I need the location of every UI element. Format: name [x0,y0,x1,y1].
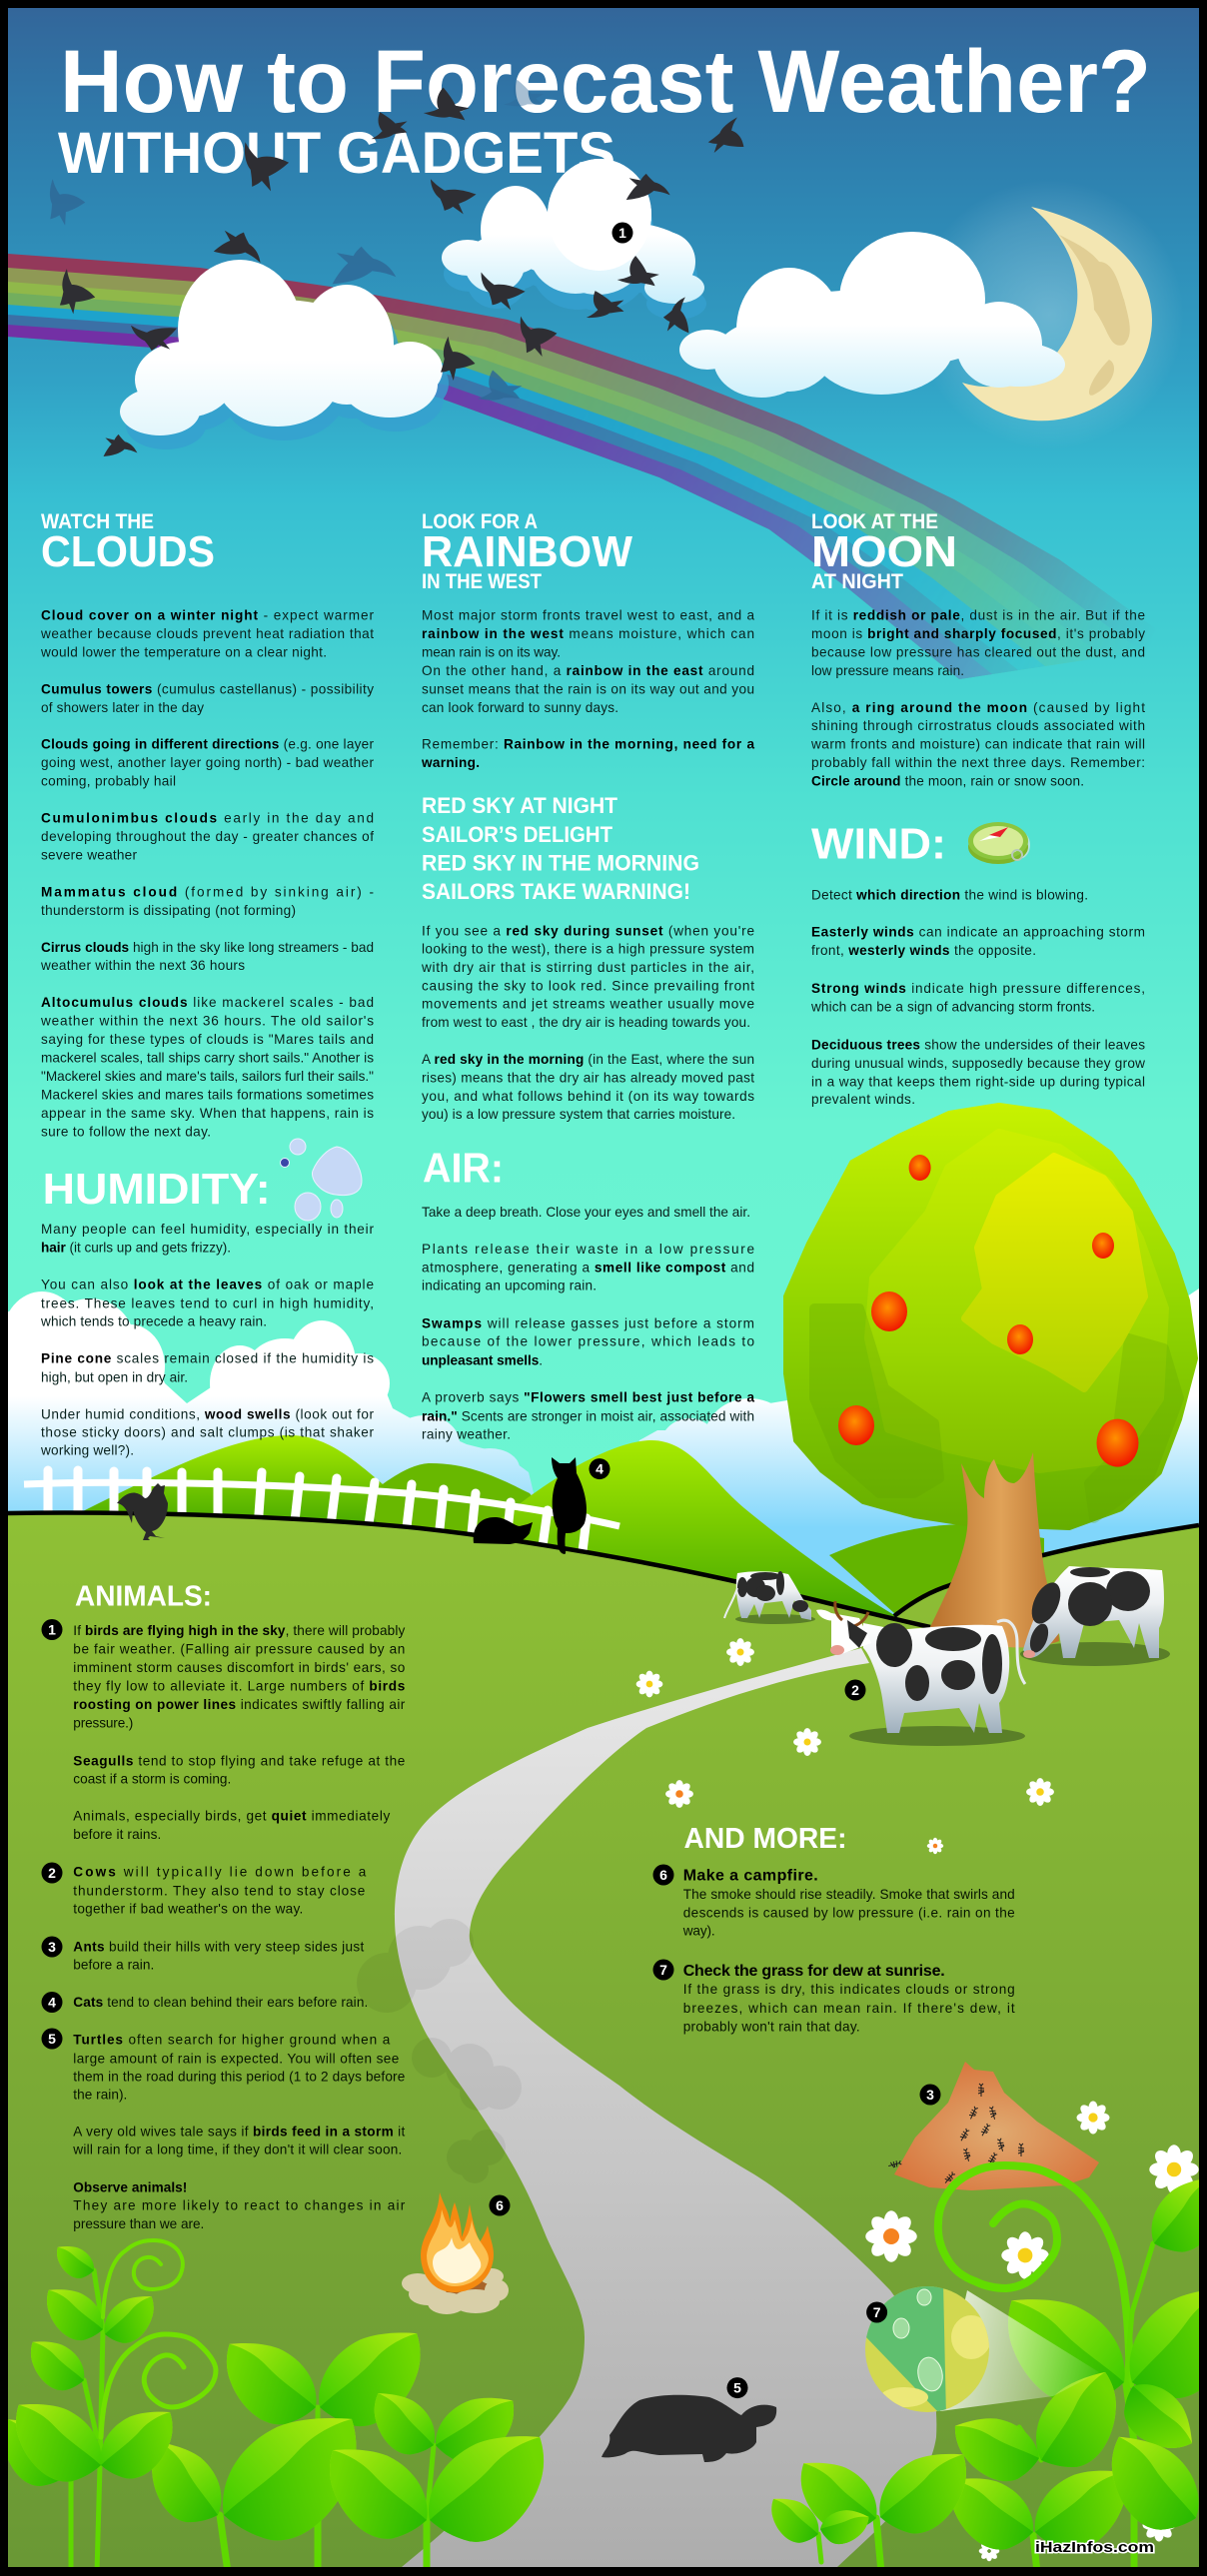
subtitle: WITHOUT GADGETS [58,121,615,186]
title: How to Forecast Weather? [60,31,1151,131]
animals text [72,1623,406,2231]
air text: Plants release their waste in a low pressure [422,1242,754,1257]
right cow [1020,1566,1170,1666]
rainbow text: sunset means that the rain is on its way out and you [422,681,754,696]
numbered badges [42,1619,62,2050]
heading: IN THE WEST [422,570,542,593]
air text: Take a deep breath. Close your eyes and smell the air. [422,1205,750,1220]
heading: LOOK FOR A [422,510,538,533]
clouds text: sure to follow the next day. [41,1124,211,1139]
badge 6 fire [490,2195,510,2215]
and more text: Check the grass for dew at sunrise. [683,1963,945,1980]
red sky text: movements and jet streams weather usually move [422,997,754,1012]
animals text: together if bad weather's on the way. [73,1902,303,1916]
animals text: imminent storm causes discomfort in birds' ears, so [73,1660,405,1675]
and more text: way). [682,1924,715,1938]
wind text: during unusual winds, supposedly because they grow [811,1056,1145,1071]
rainbow text: can look forward to sunny days. [422,700,618,715]
clouds text: Cumulonimbus clouds early in the day and [41,811,374,826]
numbered badges: 2 [48,1865,56,1881]
badge 6 fire: 6 [496,2197,504,2213]
animals text: the rain). [73,2088,127,2102]
clouds text: "Mackerel skies and mare's tails, sailors furl their sails." [41,1069,374,1084]
clouds text: Cumulus towers (cumulus castellanus) - possibility [41,681,374,696]
clouds text: Cloud cover on a winter night - expect warmer [41,607,374,623]
badge 3 ants [919,2084,941,2106]
and more text: The smoke should rise steadily. Smoke that swirls and [683,1887,1015,1902]
rainbow text: Most major storm fronts travel west to east, and a [422,607,754,623]
wind text: in a way that keeps them right-side up during typical [811,1074,1145,1089]
campfire [402,2192,509,2314]
heading: HUMIDITY: [43,1165,271,1214]
heading: AT NIGHT [811,570,903,593]
clouds text: Mackerel skies and mares tails formations sometimes [41,1087,374,1102]
wind text: prevalent winds. [811,1092,915,1107]
red sky text: If you see a red sky during sunset (when you're [422,923,754,939]
cat sitting [552,1457,587,1554]
humidity text: Under humid conditions, wood swells (look out for [41,1406,374,1422]
badge 7 dew: 7 [873,2304,881,2320]
wind text: Detect which direction the wind is blowing. [811,887,1088,903]
badge 5 turtle: 5 [733,2380,741,2396]
heading: RAINBOW [422,527,632,576]
numbered badges: 5 [48,2031,56,2047]
clouds text: mackerel scales, tall ships carry short sails." Another is [41,1051,374,1065]
heading: ANIMALS: [75,1581,212,1613]
air text: A proverb says "Flowers smell best just before a [422,1390,754,1404]
red sky text: rises) means that the dry air has already moved past [422,1071,754,1086]
heading: AND MORE: [683,1823,847,1855]
cat lying [474,1517,533,1544]
air text [422,1205,754,1442]
animals text: A very old wives tale says if birds feed in a storm it [73,2124,406,2140]
humidity text: hair (it curls up and gets frizzy). [41,1241,231,1255]
animals text: large amount of rain is expected. You will often see [73,2052,399,2066]
badge 2 cow: 2 [851,1682,859,1698]
wind text [810,887,1145,1107]
animals text: Animals, especially birds, get quiet immediately [73,1808,391,1824]
humidity text: working well?). [40,1442,134,1458]
humidity text: which tends to precede a heavy rain. [40,1314,267,1328]
humidity text: trees. These leaves tend to curl in high humidity, [41,1296,374,1310]
air text: indicating an upcoming rain. [422,1279,597,1292]
humidity text: those sticky doors) and salt clumps (is that shaker [41,1424,374,1440]
sky gradient [8,8,1199,1494]
moon text: warm fronts and moisture) can indicate that rain will [810,737,1145,752]
low clouds [0,1288,1199,1728]
cloud shadows [126,216,706,449]
badge 1 sky [611,222,633,244]
rainbow text: On the other hand, a rainbow in the east around [422,663,754,678]
badge 5 turtle [727,2377,747,2398]
dew drops [893,2289,945,2393]
wind text: front, westerly winds the opposite. [811,943,1036,958]
ant hill [887,2062,1099,2190]
panel: wind [810,819,1145,1107]
panel: look for a rainbow [421,510,754,1122]
plants right [759,2162,1207,2572]
fence [24,1466,620,1550]
animals text: Observe animals! [73,2179,187,2195]
clouds text: coming, probably hail [41,774,176,789]
rainbow text [421,607,754,770]
badge 2 cow [845,1680,865,1700]
heading: WATCH THE [41,510,154,533]
moon [943,194,1170,435]
cloud left [120,260,443,435]
watermark: iHazInfos.com [1035,2539,1154,2556]
numbered badges: 6 [659,1867,667,1883]
panel: air [422,1145,754,1442]
animals text: Turtles often search for higher ground when a [73,2032,391,2048]
badge 4 cat: 4 [596,1461,604,1477]
clouds text [40,607,374,1139]
moon text: Also, a ring around the moon (caused by light [811,700,1145,715]
numbered badges: 7 [659,1962,667,1978]
cloud right [679,232,1065,398]
leaves [8,2246,544,2542]
and more text: descends is caused by low pressure (i.e. rain on the [683,1906,1015,1920]
red sky text: A red sky in the morning (in the East, where the sun [422,1052,754,1067]
red sky text: you) is a low pressure system that carries moisture. [422,1107,735,1122]
rainbow text: mean rain is on its way. [422,644,561,659]
clouds text: would lower the temperature on a clear night. [40,644,327,659]
clouds text: severe weather [41,847,137,863]
tree trunk [930,1452,1059,1647]
animals text: They are more likely to react to changes in air [73,2197,406,2213]
ants [887,2084,1024,2185]
magnifier lens: dew [859,2282,1099,2417]
clouds text: developing throughout the day - greater chances of [41,829,374,844]
icon: compass [968,822,1030,864]
smoke puffs [357,1919,522,2183]
clouds text: of showers later in the day [41,700,204,715]
spiral tendril right [938,2165,1130,2384]
animals text: If birds are flying high in the sky, there will probably [73,1623,406,1638]
moon text: If it is reddish or pale, dust is in the air. But if the [811,607,1145,623]
red sky text: from west to east , the dry air is heading towards you. [422,1015,750,1030]
rainbow text: Remember: Rainbow in the morning, need for a [422,737,754,752]
and more text [682,1868,1015,2034]
clouds text: weather within the next 36 hours [40,958,245,973]
animals text: before it rains. [73,1827,161,1842]
rooster [117,1483,168,1540]
wind text: Strong winds indicate high pressure differences, [811,981,1145,996]
and more text: probably won't rain that day. [683,2020,860,2034]
numbered badges: 4 [48,1994,56,2010]
spirals [101,2240,216,2437]
animals text: they fly low to alleviate it. Large numbers of birds [73,1678,405,1694]
title [58,31,1151,186]
and more text: breezes, which can mean rain. If there's dew, it [683,2001,1015,2016]
animals text: Cows will typically lie down before a [73,1864,367,1880]
animals text: thunderstorm. They also tend to stay close [73,1884,365,1898]
animals text: coast if a storm is coming. [73,1772,231,1786]
clouds text: Cirrus clouds high in the sky like long streamers - bad [41,940,374,955]
clouds text: going west, another layer going north) - bad weather [41,755,374,770]
numbered badges [653,1864,673,1980]
numbered badges: 1 [48,1622,56,1638]
road [395,1648,936,2567]
badge 1 sky: 1 [618,225,626,241]
hills [83,1435,1044,1618]
moon text: shining through cirrostratus clouds associated with [811,718,1145,733]
horizon lines [8,1513,1199,1627]
animals text: Ants build their hills with very steep sides just [73,1940,365,1954]
red sky heading: RED SKY AT NIGHT [422,793,618,818]
badge 7 dew [866,2301,887,2323]
animals text: will rain for a long time, if they don't it will clear soon. [72,2142,402,2157]
red sky heading [422,793,699,904]
badge 4 cat [590,1458,609,1479]
humidity text: You can also look at the leaves of oak or maple [41,1277,374,1292]
flock of birds [35,78,747,458]
red sky text: looking to the west), there is a high pressure system [422,942,754,957]
animals text: before a rain. [73,1957,154,1972]
red sky text: with dry air that is stirring dust particles in the air, [421,960,754,975]
turtle [602,2395,776,2462]
air text: rainy weather. [422,1426,511,1442]
red sky text: you, and what follows behind it (on its way towards [422,1089,754,1104]
air text: Swamps will release gasses just before a storm [422,1316,754,1330]
rainbow text: warning. [421,755,480,770]
tree [786,1106,1195,1647]
humidity text: Pine cone scales remain closed if the humidity is [41,1350,374,1366]
heading: AIR: [423,1145,504,1191]
clouds text: weather because clouds prevent heat radiation that [40,626,374,641]
panel: humidity [40,1139,374,1458]
wind text: Easterly winds can indicate an approaching storm [811,924,1145,939]
panel: animals [42,1581,406,2231]
numbered badges: 3 [48,1939,56,1955]
cloud center over subtitle [548,159,651,271]
clouds text: Altocumulus clouds like mackerel scales - bad [41,995,374,1010]
panel: watch the clouds [40,510,374,1139]
air text: atmosphere, generating a smell like compost and [422,1261,754,1275]
wind text: Deciduous trees show the undersides of their leaves [811,1037,1145,1053]
cloud center [442,159,704,304]
icon: water drops [280,1139,362,1221]
heading: MOON [811,527,957,576]
wind text: which can be a sign of advancing storm fronts. [810,999,1095,1014]
panel: look at the moon [810,510,1145,789]
animals text: pressure.) [73,1715,133,1730]
animals text: them in the road during this period (1 to 2 days before [73,2070,405,2084]
animals text: Cats tend to clean behind their ears before rain. [73,1995,368,2010]
stems [818,2243,1153,2572]
apples [838,1155,1139,1467]
heading [422,510,632,593]
animals text: be fair weather. (Falling air pressure caused by an [73,1642,405,1656]
moon text [810,607,1145,789]
humidity text: high, but open in dry air. [41,1370,188,1384]
clouds text: thunderstorm is dissipating (not forming) [41,903,296,918]
air text: unpleasant smells. [422,1352,543,1368]
moon text: because low pressure has cleared out the dust, and [811,644,1145,659]
red sky heading: SAILOR’S DELIGHT [422,822,613,847]
plants left [0,2238,573,2572]
rainbow [8,254,1179,679]
daisies [636,1638,1199,2561]
air text: because of the lower pressure, which leads to [422,1334,754,1348]
clouds text: weather within the next 36 hours. The old sailor's [40,1014,374,1029]
moon text: moon is bright and sharply focused, it's probably [811,626,1145,641]
tree canopy [786,1106,1195,1527]
front cow [816,1601,1025,1746]
ground [8,1513,1199,2567]
moon text: probably fall within the next three days. Remember: [811,755,1145,770]
clouds text: Clouds going in different directions (e.g. one layer [41,737,374,752]
humidity text: Many people can feel humidity, especially in their [41,1222,374,1237]
clouds text: saying for these types of clouds is "Mares tails and [41,1032,374,1047]
small cow [724,1571,815,1624]
badge 3 ants: 3 [926,2087,934,2103]
and more text: If the grass is dry, this indicates clouds or strong [683,1982,1015,1997]
heading [811,510,957,593]
moon text: Circle around the moon, rain or snow soon. [811,774,1084,789]
humidity text [40,1222,374,1458]
leaves [771,2179,1199,2550]
animals text: Seagulls tend to stop flying and take refuge at the [73,1754,405,1768]
red sky text: causing the sky to look red. Since prevailing front [422,978,754,993]
clouds text: appear in the same sky. When that happens, rain is [41,1106,374,1121]
air text: rain." Scents are stronger in moist air, associated with [422,1408,754,1424]
animals text: roosting on power lines indicates swiftly falling air [73,1697,406,1712]
moon text: low pressure means rain. [811,663,964,678]
heading: WIND: [811,819,946,869]
red sky heading: SAILORS TAKE WARNING! [422,879,690,904]
heading: CLOUDS [41,527,215,576]
red sky heading: RED SKY IN THE MORNING [422,851,699,875]
and more text: Make a campfire. [683,1868,818,1885]
stems [71,2270,434,2572]
heading: LOOK AT THE [811,510,938,533]
rainbow text: rainbow in the west means moisture, which can [422,626,754,641]
clouds text: Mammatus cloud (formed by sinking air) - [41,884,374,899]
panel: and more [653,1823,1015,2034]
animals text: pressure than we are. [73,2216,204,2231]
red sky text [421,923,754,1122]
